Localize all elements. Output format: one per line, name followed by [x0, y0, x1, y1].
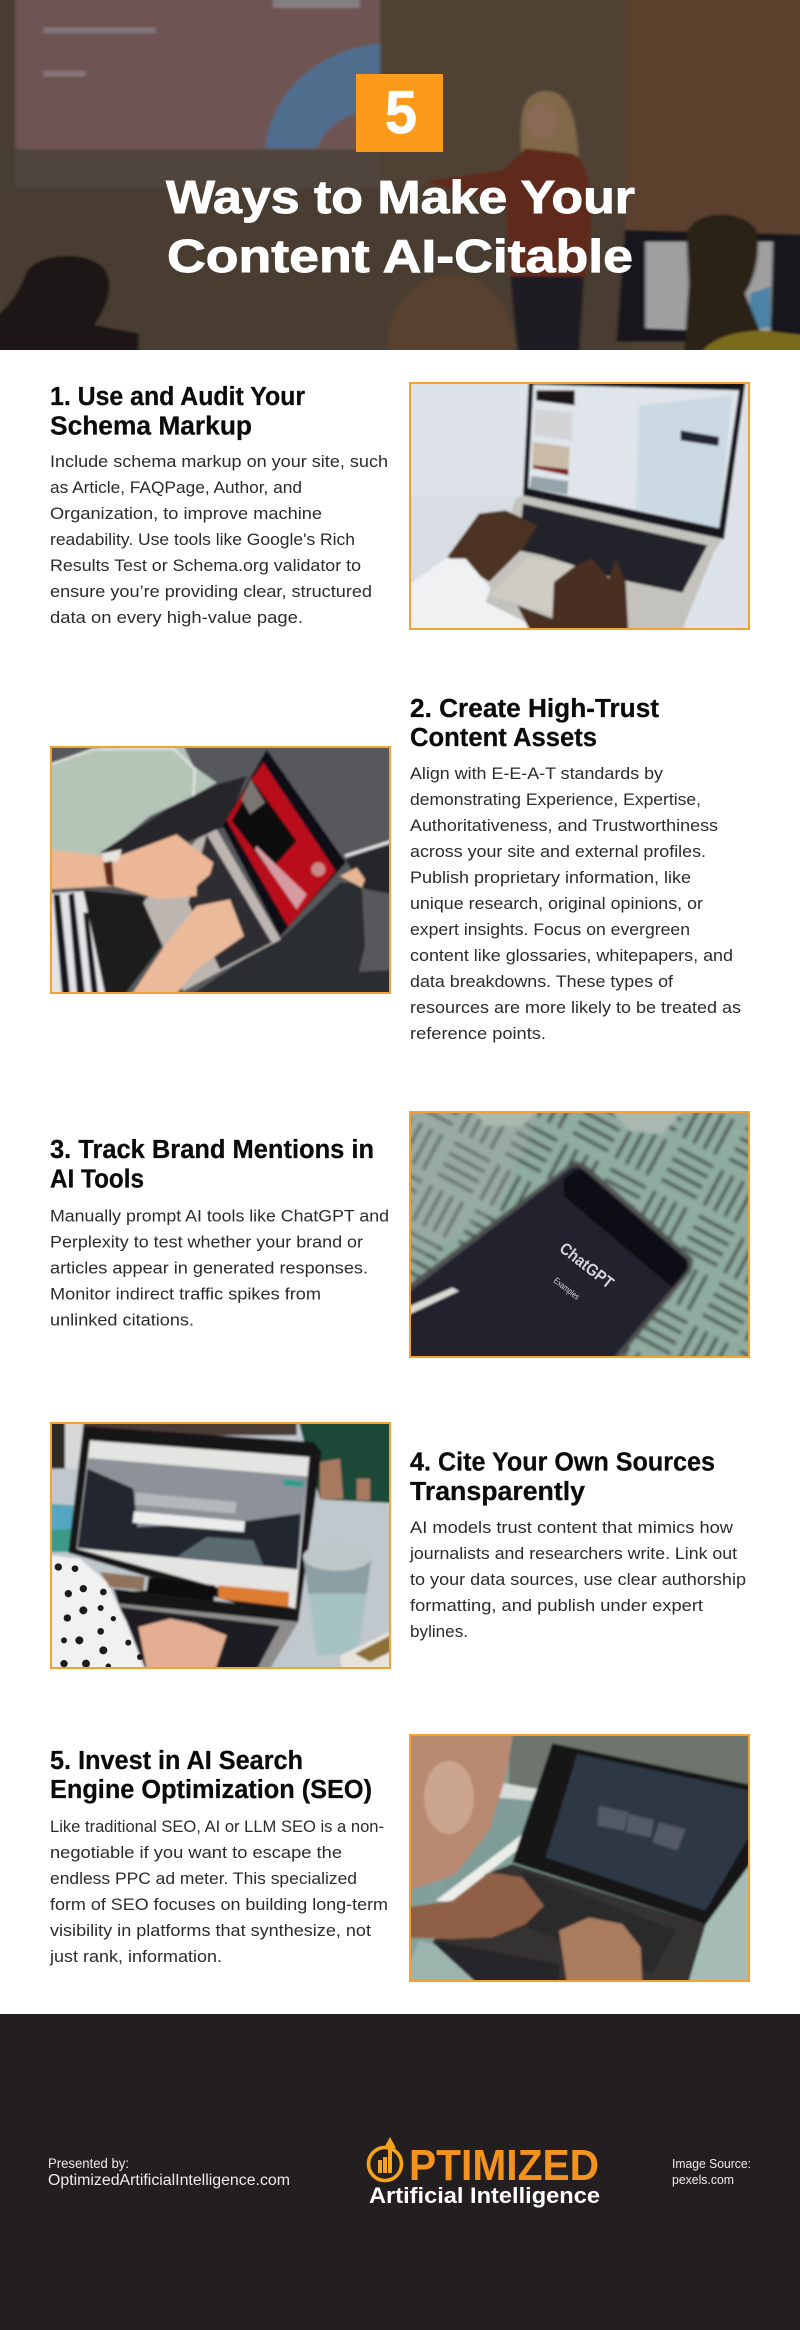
heading 5: Engine Optimization (SEO) — [50, 1776, 372, 1804]
image source credit: pexels.com — [672, 2173, 734, 2187]
body text 3 — [50, 1206, 389, 1330]
body text 5: form of SEO focuses on building long-term — [50, 1895, 388, 1914]
body text 2: data breakdowns. These types of — [410, 972, 673, 991]
body text 2: across your site and external profiles. — [410, 842, 706, 861]
body text 2: resources are more likely to be treated as — [410, 998, 741, 1017]
body text 4: formatting, and publish under expert — [410, 1596, 703, 1615]
body text 2: content like glossaries, whitepapers, and — [410, 946, 733, 965]
body text 5: visibility in platforms that synthesize, not — [50, 1921, 371, 1940]
body text 4: AI models trust content that mimics how — [410, 1518, 734, 1537]
photo 5: person typing on dark laptop — [409, 1734, 750, 1982]
presented by credit: OptimizedArtificialIntelligence.com — [48, 2172, 290, 2189]
body text 4: to your data sources, use clear authorship — [410, 1570, 746, 1589]
body text 2: demonstrating Experience, Expertise, — [410, 790, 701, 809]
body text 1: data on every high-value page. — [50, 608, 303, 627]
footer — [0, 2014, 800, 2330]
presented by credit — [48, 2156, 290, 2189]
body text 2: unique research, original opinions, or — [410, 894, 703, 913]
logo icon: ring with bars and arrow — [368, 2137, 402, 2180]
heading 2: Content Assets — [410, 724, 597, 752]
heading 3: 3. Track Brand Mentions in — [50, 1136, 374, 1164]
body text 5: endless PPC ad meter. This specialized — [50, 1869, 357, 1888]
body text 1 — [50, 452, 388, 627]
image source credit — [672, 2157, 751, 2187]
body text 5: negotiable if you want to escape the — [50, 1843, 342, 1862]
body text 3: Perplexity to test whether your brand or — [50, 1232, 363, 1252]
logo wordmark: PTIMIZED — [409, 2141, 599, 2190]
logo — [368, 2137, 600, 2208]
body text 1: Include schema markup on your site, such — [50, 452, 388, 471]
section 4: cite sources — [37, 1409, 746, 1685]
body text 4: bylines. — [410, 1622, 468, 1641]
section 3: brand mentions — [50, 1091, 769, 1378]
hero background photo: presenter in room — [0, 0, 800, 350]
body text 3: Monitor indirect traffic spikes from — [50, 1284, 321, 1304]
heading 2 — [410, 695, 660, 752]
body text 1: Results Test or Schema.org validator to — [50, 556, 361, 575]
heading 4 — [410, 1448, 715, 1506]
body text 4: journalists and researchers write. Link out — [409, 1544, 737, 1563]
body text 1: ensure you’re providing clear, structured — [50, 582, 372, 601]
body text 5: just rank, information. — [49, 1947, 222, 1966]
body text 1: readability. Use tools like Google's Rich — [50, 530, 355, 549]
body text 2: Publish proprietary information, like — [410, 868, 691, 887]
heading 2: 2. Create High-Trust — [410, 695, 660, 723]
heading 1: 1. Use and Audit Your — [50, 383, 305, 411]
heading 3 — [50, 1136, 374, 1194]
body text 1: Organization, to improve machine — [50, 504, 322, 523]
body text 4 — [409, 1518, 746, 1641]
heading 3: AI Tools — [50, 1166, 144, 1194]
body text 2: Authoritativeness, and Trustworthiness — [410, 816, 718, 835]
body text 3: articles appear in generated responses. — [50, 1258, 368, 1278]
hero banner — [0, 0, 800, 363]
body text 3: Manually prompt AI tools like ChatGPT and — [50, 1206, 389, 1226]
body text 2: expert insights. Focus on evergreen — [410, 920, 690, 939]
number badge: 5 — [385, 79, 417, 146]
heading 4: 4. Cite Your Own Sources — [410, 1448, 715, 1476]
heading 5: 5. Invest in AI Search — [50, 1747, 303, 1775]
heading 1 — [50, 383, 305, 440]
photo 3: phone showing ChatGPT on patterned surface — [409, 1111, 750, 1358]
number badge — [356, 74, 443, 152]
logo subtitle: Artificial Intelligence — [369, 2183, 600, 2208]
section 5: AI SEO — [49, 1721, 762, 1997]
title — [166, 171, 635, 282]
image source credit: Image Source: — [672, 2157, 751, 2171]
presented by credit: Presented by: — [48, 2156, 129, 2171]
body text 2 — [410, 764, 741, 1043]
body text 2: reference points. — [410, 1024, 546, 1043]
body text 5: Like traditional SEO, AI or LLM SEO is a non- — [50, 1817, 384, 1836]
body text 3: unlinked citations. — [50, 1310, 194, 1330]
heading 5 — [50, 1747, 372, 1804]
body text 1: as Article, FAQPage, Author, and — [50, 478, 302, 497]
title: Ways to Make Your — [166, 171, 635, 223]
section 1: schema markup — [50, 369, 762, 645]
photo 4: laptop with photo site beside glass — [50, 1422, 391, 1669]
phone screen text: ChatGPT — [556, 1239, 617, 1292]
section 2: high-trust content — [37, 695, 741, 1043]
photo 1: laptop with map on desk — [409, 382, 750, 630]
heading 1: Schema Markup — [50, 412, 252, 440]
phone screen text: Examples — [552, 1275, 582, 1302]
body text 2: Align with E-E-A-T standards by — [410, 764, 664, 783]
body text 5 — [49, 1817, 388, 1966]
title: Content AI-Citable — [167, 230, 633, 282]
photo 2: laptop on lap with red screen — [50, 746, 391, 994]
heading 4: Transparently — [410, 1478, 586, 1506]
